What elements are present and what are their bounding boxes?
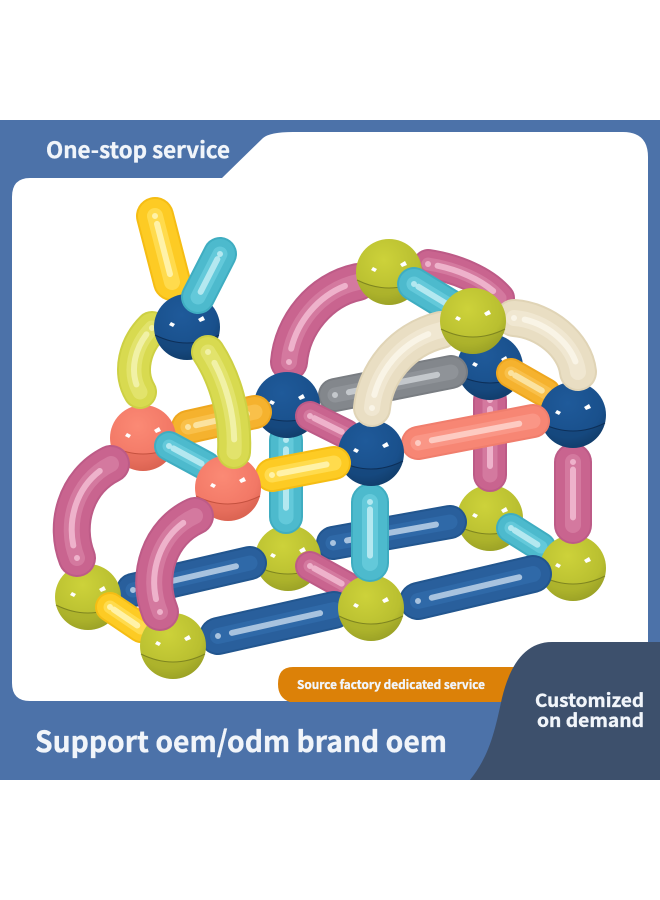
ball: olive right (540, 535, 606, 601)
ball: coral front (195, 455, 261, 521)
blue background band (0, 120, 660, 780)
rod: blue long back left (133, 563, 250, 590)
rod: beige curved right (514, 318, 578, 372)
rod: orange back (188, 412, 255, 427)
rod: grey (335, 372, 451, 395)
magnetic building toy (55, 216, 606, 679)
ball: blue center (338, 420, 404, 486)
rod: cyan small right (511, 528, 541, 547)
ball: olive center front (338, 575, 404, 641)
rod: pink curved top (289, 282, 358, 362)
heading: one-stop service: One-stop service (46, 133, 230, 165)
text: customized on demand (535, 687, 644, 733)
rod: cyan small left (169, 446, 206, 466)
rod: lime curved right (208, 352, 234, 452)
rod: pink curved back (428, 264, 500, 298)
rod: cyan vertical center (351, 502, 389, 563)
rod: pink curved front (154, 516, 195, 612)
ball: olive left (55, 564, 121, 630)
rod: yellow middle (272, 463, 334, 475)
rod: yellow small front (110, 607, 141, 628)
rod: pink small upper (310, 416, 346, 434)
rod: cyan vertical back (269, 440, 303, 517)
text: customized on demand: on demand (537, 707, 644, 733)
ball: blue right (540, 382, 606, 448)
ball: blue middle (254, 372, 320, 438)
rod: cyan top (198, 254, 220, 297)
orange label text: Source factory dedicated service (297, 676, 485, 693)
rod: beige curved left (372, 330, 441, 408)
rod: cyan top right (414, 284, 450, 306)
ball: blue middle back (457, 334, 523, 400)
white product panel (12, 132, 648, 701)
orange label bar (278, 667, 520, 702)
rod: lime curved left (134, 328, 152, 392)
heading: support oem/odm brand oem: Support oem/odm brand oem (35, 719, 447, 761)
text: customized on demand: Customized (535, 687, 644, 713)
ball: olive back middle (255, 525, 321, 591)
dark corner panel (470, 642, 660, 780)
rod: yellow top (155, 216, 172, 282)
ball: coral left (110, 405, 176, 471)
rod: pink vertical right (554, 462, 592, 525)
rod: pink vertical back (473, 400, 507, 475)
rod: pink small lower (310, 566, 346, 586)
rod: pink curved left (72, 464, 111, 558)
rod: coral long (418, 421, 533, 443)
rod: blue long front right (418, 574, 533, 601)
ball: olive back right (457, 485, 523, 551)
ball: olive top (356, 239, 422, 305)
rod: blue long back (333, 522, 450, 543)
rod: orange right (511, 373, 546, 393)
ball: blue top (154, 294, 220, 360)
rod: blue long front left (218, 610, 334, 636)
ball: olive upper (440, 288, 506, 354)
ball: olive front left (140, 613, 206, 679)
